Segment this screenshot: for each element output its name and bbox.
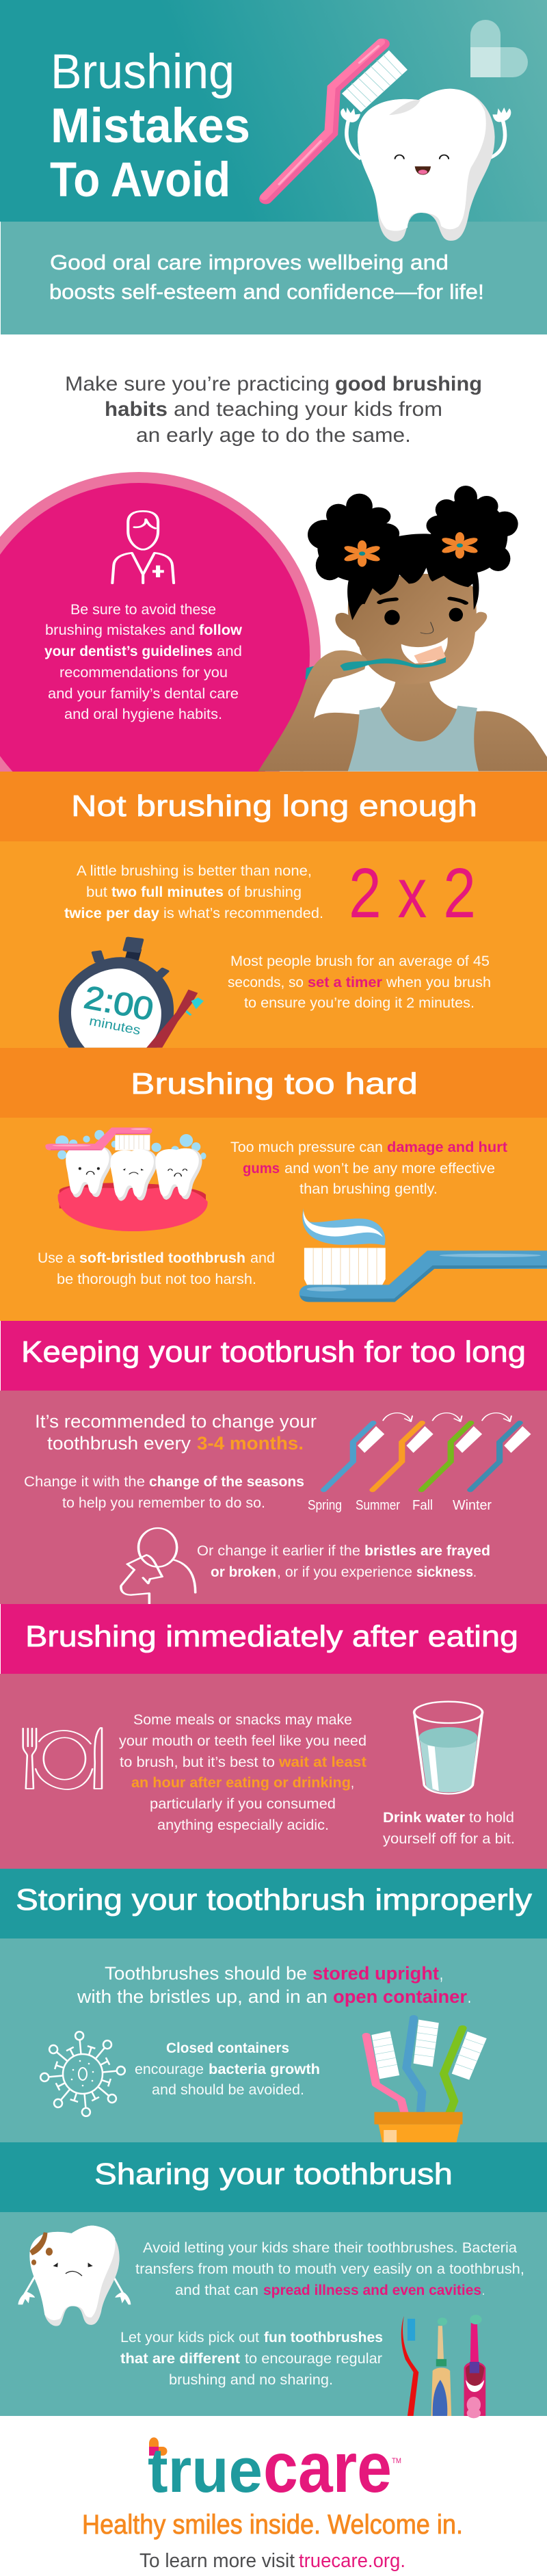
text: intro statement: Make sure you’re practicing [65, 373, 330, 395]
subtitle band: boosts self-esteem and confidence—for life! [49, 280, 484, 304]
text: soft-bristled toothbrush: and [250, 1250, 275, 1266]
title [50, 45, 250, 207]
text: too much pressure: gums [243, 1160, 280, 1177]
icon: pink toothbrush [264, 42, 408, 199]
text: callout copy: Be sure to avoid these [70, 601, 216, 618]
tagline: Healthy smiles inside. Welcome in. [82, 2510, 463, 2540]
text: drink water: to hold [469, 1809, 514, 1826]
text: intro statement: good brushing [335, 373, 482, 395]
text: wait at least an hour: wait at least [278, 1754, 366, 1770]
text: set a timer: to ensure you’re doing it 2 minutes. [244, 995, 475, 1011]
text: callout copy: and [217, 643, 242, 659]
heading: Brushing too hard [131, 1067, 418, 1101]
text: fun toothbrushes [120, 2329, 383, 2388]
panel: storing your toothbrush improperly [0, 1869, 547, 2143]
panel: brushing immediately after eating [0, 1604, 547, 1869]
text: wait at least an hour: particularly if you consumed [150, 1796, 336, 1812]
panel: not brushing long enough [0, 772, 547, 1048]
text: closed containers: Closed containers [166, 2040, 289, 2056]
text: two full minutes: two full minutes [111, 884, 224, 900]
text: two full minutes: twice per day [64, 905, 159, 921]
text: stored upright: . [468, 1986, 471, 2007]
text: two full minutes: A little brushing is better than none, [77, 863, 312, 879]
text: set a timer [228, 953, 491, 1011]
text: stored upright: , [440, 1963, 443, 1984]
season labels: Spring [308, 1498, 342, 1513]
text: too much pressure: and won’t be any more effective [284, 1160, 495, 1177]
icon: fall toothbrush [421, 1423, 482, 1490]
panel: hero header [0, 0, 547, 334]
text: stored upright: with the bristles up, and in an [77, 1986, 328, 2007]
text: two full minutes [64, 863, 323, 921]
text: stored upright: Toothbrushes should be [105, 1963, 307, 1984]
text: too much pressure: damage and hurt [387, 1139, 507, 1155]
text: frayed bristles: , or if you experience [277, 1564, 412, 1580]
text: closed containers: bacteria growth [209, 2061, 320, 2077]
text: closed containers: and should be avoided. [152, 2081, 304, 2098]
text: too much pressure: Too much pressure can [230, 1139, 383, 1155]
icon: winter toothbrush [470, 1423, 531, 1490]
text: wait at least an hour: to brush, but it’s best to [120, 1754, 275, 1770]
text: fun toothbrushes: fun toothbrushes [264, 2329, 383, 2345]
icon: smiling tooth mascot [341, 89, 511, 241]
panel: sharing your toothbrush [0, 2142, 547, 2418]
text: callout copy: follow [199, 622, 242, 638]
text: closed containers [135, 2040, 320, 2098]
season labels: Fall [412, 1498, 433, 1513]
text: set a timer: seconds, so [228, 974, 304, 990]
text: do not share: . [482, 2282, 485, 2298]
icon: sick person with tissue [121, 1528, 196, 1604]
text: set a timer: Most people brush for an average of 45 [230, 953, 490, 969]
text: two full minutes: of brushing [228, 884, 302, 900]
text: frayed bristles [197, 1542, 490, 1580]
panel: footer [82, 2428, 463, 2572]
illustration: blue toothbrush with paste [299, 1209, 547, 1302]
logo: truecare: true [148, 2436, 263, 2506]
text: change of the seasons: to help you remember to do so. [62, 1495, 265, 1511]
text: soft-bristled toothbrush: soft-bristled toothbrush [79, 1250, 245, 1266]
icon: plate and cutlery [23, 1728, 102, 1789]
text: callout copy: and your family’s dental care [48, 685, 239, 702]
heading: Brushing immediately after eating [25, 1620, 518, 1653]
text: wait at least an hour: anything especially acidic. [157, 1817, 329, 1833]
text: wait at least an hour: your mouth or teeth feel like you need [119, 1733, 366, 1749]
text: drink water: Drink water [383, 1809, 466, 1826]
title: Mistakes [51, 99, 250, 153]
text: change every 3-4 months [35, 1411, 317, 1454]
text: do not share: spread illness and even cavities [263, 2282, 481, 2298]
text: do not share: and that can [175, 2282, 258, 2298]
icon: glass of water [414, 1702, 483, 1793]
season labels [308, 1498, 492, 1513]
chart: seasonal toothbrush sequence [308, 1413, 531, 1513]
call to action: To learn more visit [139, 2550, 295, 2572]
season labels: Winter [453, 1498, 492, 1513]
text: intro statement: an early age to do the same. [136, 424, 411, 447]
text: soft-bristled toothbrush: Use a [38, 1250, 75, 1266]
text: fun toothbrushes: brushing and no sharing. [169, 2371, 333, 2388]
text: too much pressure: than brushing gently. [299, 1181, 438, 1197]
text: change every 3-4 months: It’s recommended to change your [35, 1411, 317, 1432]
text: stored upright [77, 1963, 471, 2007]
text: change every 3-4 months: 3-4 months. [197, 1433, 304, 1454]
logo: truecare: care [263, 2428, 392, 2508]
text: callout copy [44, 601, 242, 722]
icon: dentist [112, 511, 174, 583]
heading [0, 2142, 547, 2212]
panel: introduction [0, 373, 547, 839]
icon: summer toothbrush [373, 1423, 433, 1490]
logo: truecare [148, 2428, 401, 2508]
text: change of the seasons: Change it with the [24, 1473, 145, 1490]
icon: truecare heart mark [470, 20, 528, 77]
text: fun toothbrushes: that are different [120, 2350, 240, 2367]
text: fun toothbrushes: Let your kids pick out [120, 2329, 259, 2345]
icon: bacteria [40, 2032, 125, 2116]
subtitle band [1, 222, 547, 334]
text: frayed bristles: Or change it earlier if the [197, 1542, 360, 1559]
illustration: sad teeth and gums [45, 1127, 208, 1231]
text: intro statement [65, 373, 482, 447]
text: change of the seasons [24, 1473, 304, 1511]
text: intro statement: and teaching your kids from [174, 398, 442, 421]
heading [0, 1869, 547, 1938]
panel: brushing too hard [0, 1048, 547, 1321]
text: intro statement: habits [105, 398, 168, 421]
text: do not share: transfers from mouth to mouth very easily on a toothbrush, [135, 2261, 524, 2277]
heading [0, 772, 547, 841]
text: frayed bristles: . [473, 1564, 477, 1580]
icon: stopwatch: 2:00 [81, 978, 157, 1027]
text: fun toothbrushes: to encourage regular [245, 2350, 382, 2367]
call to action: truecare.org. [299, 2550, 405, 2572]
heading: Sharing your toothbrush [94, 2157, 453, 2191]
text: wait at least an hour [119, 1711, 366, 1833]
text: two full minutes: but [86, 884, 107, 900]
text: soft-bristled toothbrush: be thorough but not too harsh. [57, 1271, 256, 1287]
icon: spring toothbrush [323, 1423, 384, 1490]
illustration: kids toothbrushes [401, 2315, 485, 2418]
text: change every 3-4 months: toothbrush every [47, 1433, 191, 1454]
text: closed containers: encourage [135, 2061, 204, 2077]
panel: keeping your toothbrush too long [0, 1321, 547, 1604]
heading: Keeping your tootbrush for too long [21, 1335, 526, 1369]
text: set a timer: set a timer [308, 974, 383, 990]
text: callout copy: your dentist’s guidelines [44, 643, 213, 659]
title: Brushing [51, 45, 235, 99]
icon: stopwatch [59, 936, 204, 1048]
text: callout copy: recommendations for you [59, 664, 228, 681]
text: change of the seasons: change of the seasons [149, 1473, 304, 1490]
text: stored upright: stored upright [312, 1963, 439, 1984]
text: soft-bristled toothbrush [38, 1250, 275, 1287]
illustration: girl brushing teeth [258, 486, 547, 772]
panel: pink circle callout [0, 472, 321, 839]
text: do not share: Avoid letting your kids share their toothbrushes. Bacteria [143, 2239, 517, 2256]
subtitle band: Good oral care improves wellbeing and [50, 250, 449, 274]
text: frayed bristles: bristles are frayed [364, 1542, 490, 1559]
title: To Avoid [50, 153, 230, 207]
text: frayed bristles: or broken [211, 1564, 276, 1580]
text: do not share [135, 2239, 524, 2298]
text: drink water [383, 1809, 515, 1847]
text: stored upright: open container [333, 1986, 467, 2007]
text: frayed bristles: sickness [416, 1564, 473, 1580]
logo: truecare: TM [392, 2457, 401, 2465]
heading: Not brushing long enough [71, 789, 477, 823]
statistic: 2 x 2: 2 x 2 [349, 854, 476, 932]
heading: Storing your toothbrush improperly [16, 1883, 532, 1917]
illustration: toothbrushes in cup [366, 2018, 487, 2143]
heading [1, 1604, 547, 1674]
text: set a timer: when you brush [386, 974, 491, 990]
text: wait at least an hour: an hour after eating or drinking [131, 1774, 351, 1791]
text: two full minutes: is what’s recommended. [163, 905, 323, 921]
arrows between seasons [383, 1413, 511, 1421]
heading [1, 1321, 547, 1391]
text: too much pressure [230, 1139, 507, 1197]
text: drink water: yourself off for a bit. [383, 1830, 515, 1847]
text: wait at least an hour: , [351, 1774, 354, 1791]
icon: sad tooth with cavities [18, 2226, 131, 2326]
icon: stopwatch: minutes [88, 1014, 142, 1038]
season labels: Summer [356, 1498, 400, 1513]
text: wait at least an hour: Some meals or snacks may make [133, 1711, 352, 1728]
call to action [139, 2550, 405, 2572]
text: callout copy: and oral hygiene habits. [64, 706, 222, 722]
text: callout copy: brushing mistakes and [45, 622, 195, 638]
heading [0, 1048, 547, 1118]
